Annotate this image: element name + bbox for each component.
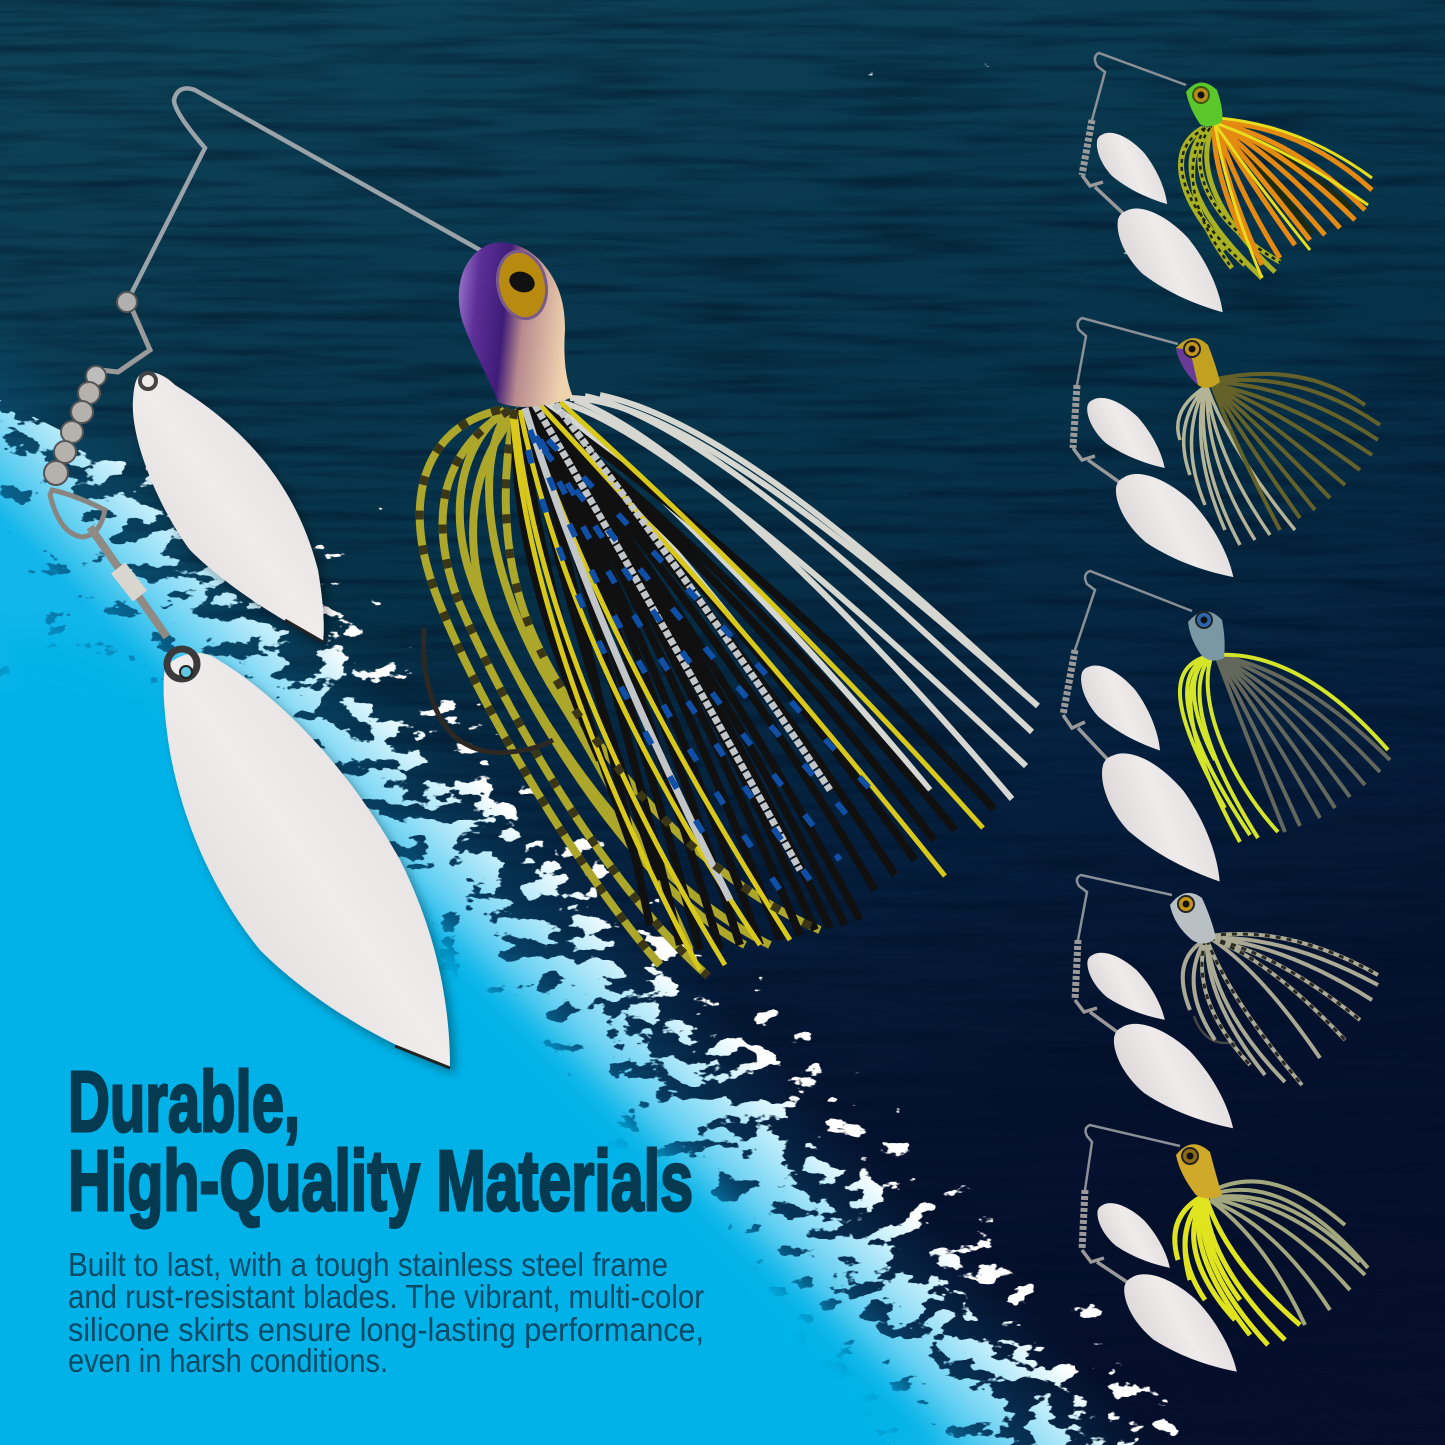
skirt: white strands [545,395,1038,840]
background: bright blue foam wave [0,63,1179,1445]
skirt: dark blotches on yellow [420,410,820,976]
description text [68,1246,704,1379]
title: High-Quality Materials [68,1134,693,1229]
description text: and rust-resistant blades. The vibrant, multi-color [68,1278,704,1315]
main spinnerbait lure [44,88,1038,1068]
title [68,1055,693,1229]
blade tail edges [285,620,450,1068]
skirt: silver glitter strands [525,404,830,900]
lure eye [491,247,553,323]
skirt: black strands [515,403,994,950]
upper blade eyelet [140,373,156,389]
swivel chain [44,292,167,637]
lower blade eyelet [167,649,197,679]
skirt: bright yellow strands [512,402,983,970]
small lure 3: chartreuse and grey [1063,571,1390,904]
description text: silicone skirts ensure long-lasting performance, [68,1311,704,1348]
small lure 4: pearl and black [1075,875,1378,1151]
description text: even in harsh conditions. [68,1342,388,1379]
small lure 5: yellow and pale green [1082,1125,1368,1393]
hook [424,628,553,753]
small lure 2: olive and glitter [1073,318,1380,600]
description text: Built to last, with a tough stainless steel frame [68,1246,668,1283]
wire frame [128,88,480,300]
upper willow blade [133,372,324,642]
skirt: blue flakes [528,430,880,890]
lure head [459,242,573,407]
title: Durable, [68,1055,300,1150]
lower willow blade [164,653,450,1068]
small lure 1: orange and green [1082,53,1372,332]
skirt: yellow looping strands [420,410,820,976]
